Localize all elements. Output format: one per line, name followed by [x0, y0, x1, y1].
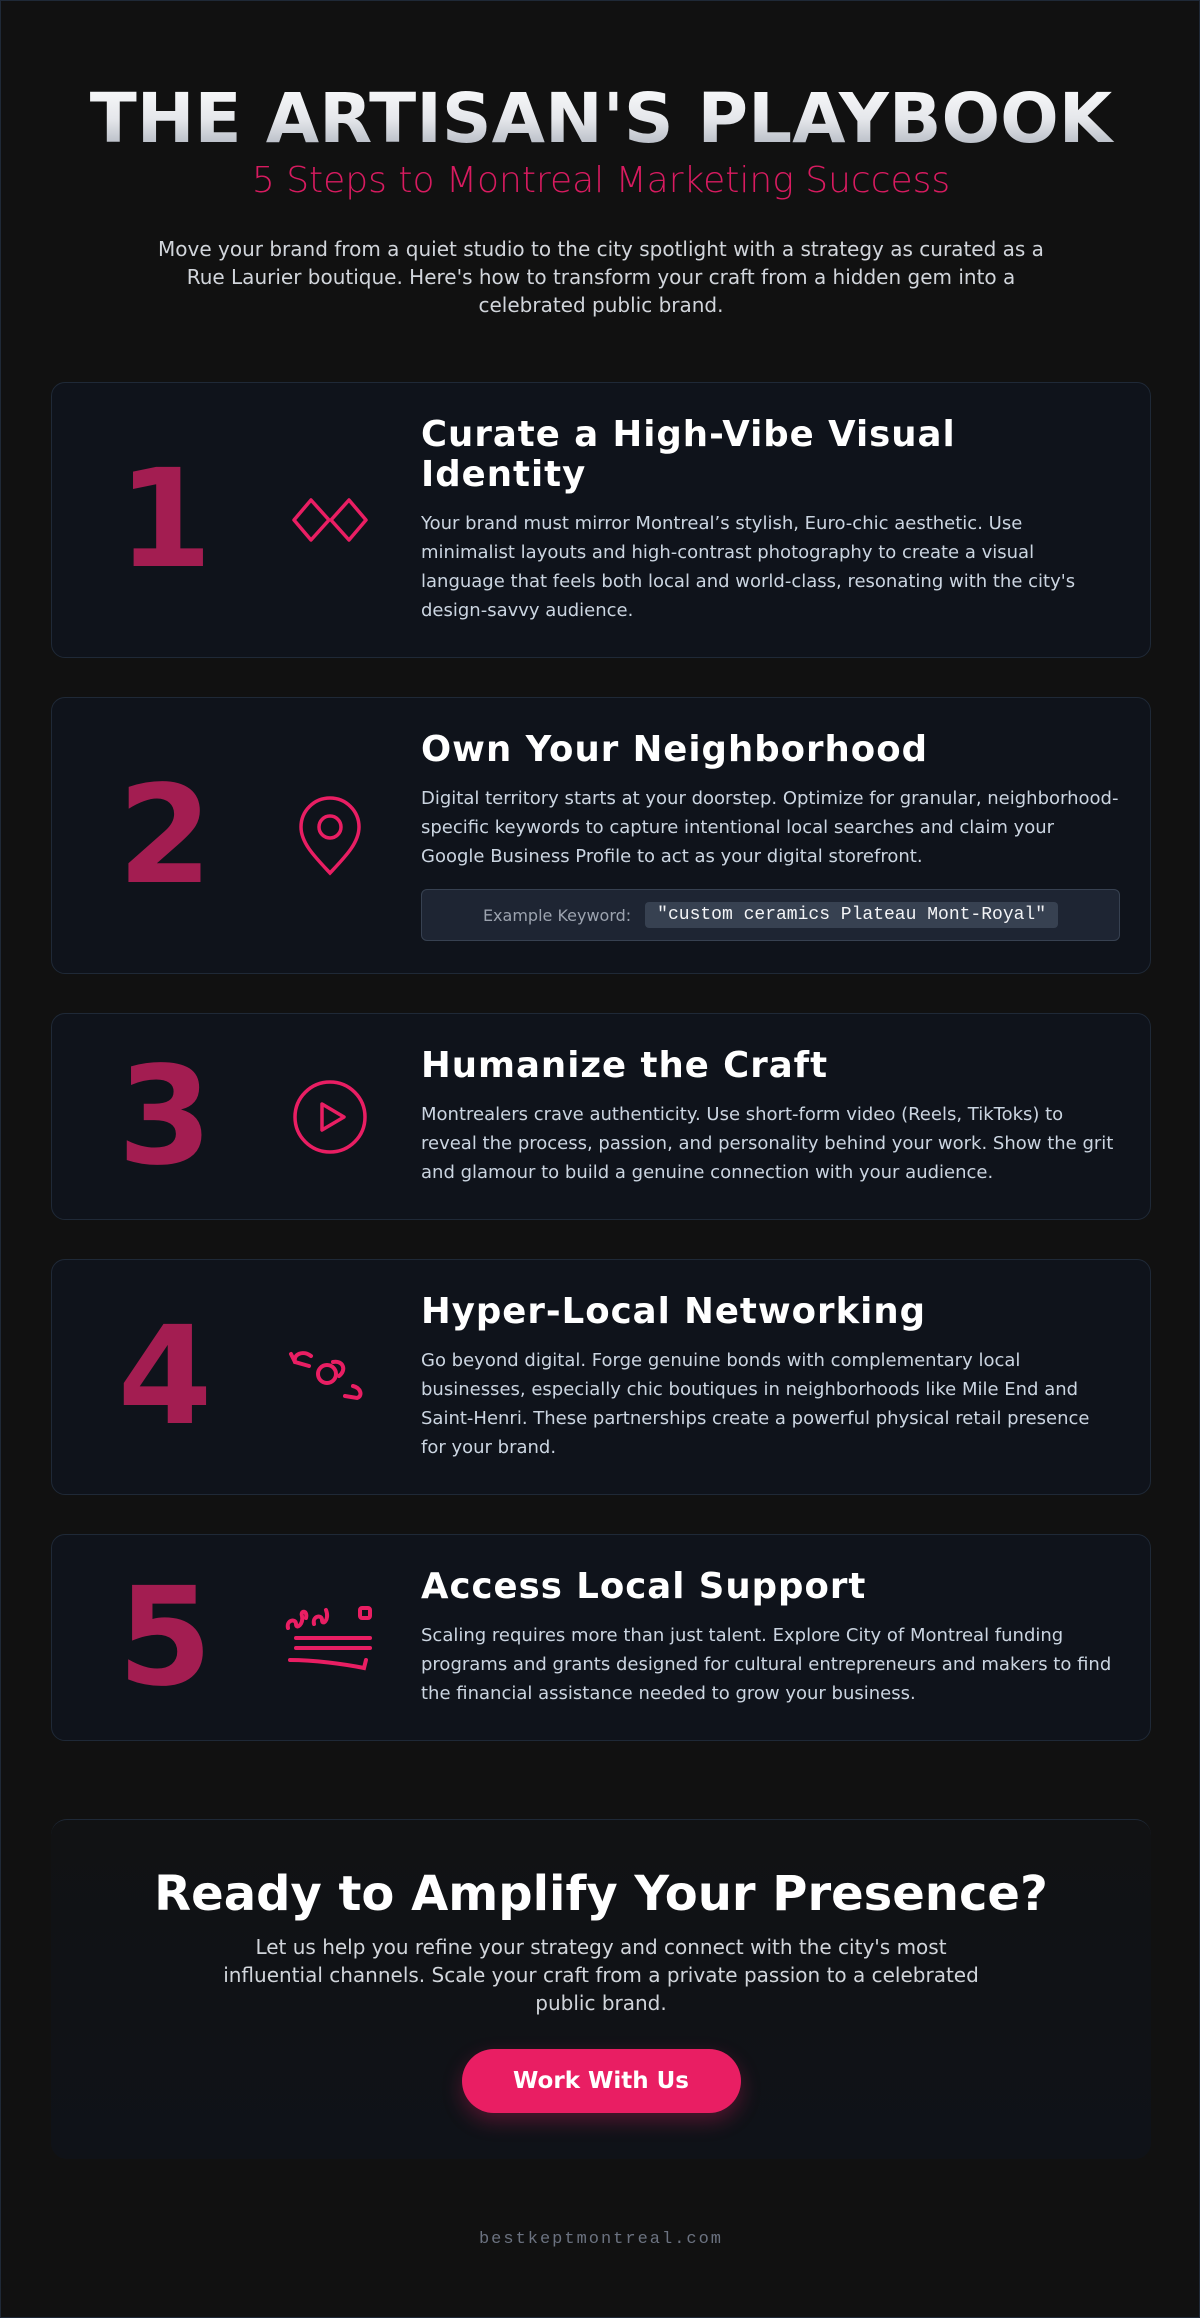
panel: call to action [51, 1819, 1151, 2159]
icon: map pin [299, 796, 361, 876]
step 5 text: Access Local Support [421, 1566, 866, 1607]
step 2 text [421, 729, 1120, 941]
intro text: Move your brand from a quiet studio to the city spotlight with a strategy as curated as a Rue Laurier boutique. Here's how to transform your craft from a hidden gem into a celebrated public brand. [158, 237, 1044, 317]
step 1 text: Curate a High-Vibe Visual Identity [421, 414, 956, 495]
number 3: 3 [118, 1038, 212, 1196]
panel: step 3 [51, 1013, 1151, 1220]
step 3 text [421, 1045, 1113, 1183]
step 3 text: Humanize the Craft [421, 1045, 828, 1086]
subtitle: 5 Steps to Montreal Marketing Success [252, 160, 950, 201]
icon: support [286, 1606, 372, 1670]
button: Work With Us [513, 2068, 689, 2094]
keyword example box: Example Keyword: [483, 906, 631, 924]
icon: networking [288, 1351, 362, 1400]
step 4 text: Hyper-Local Networking [421, 1291, 926, 1332]
step 2 text: Digital territory starts at your doorstep. Optimize for granular, neighborhood-specific keywords to capture intentional local searches and claim your Google Business Profile to act as your digital storefront. [421, 788, 1118, 867]
step 4 text: Go beyond digital. Forge genuine bonds with complementary local businesses, especially chic boutiques in neighborhoods like Mile End and Saint-Henri. These partnerships create a powerful physical retail presence for your brand. [421, 1350, 1090, 1458]
keyword example box [421, 889, 1120, 941]
number 1: 1 [118, 441, 212, 599]
keyword example box: "custom ceramics Plateau Mont-Royal" [657, 905, 1046, 925]
number 4: 4 [118, 1298, 212, 1456]
step 5 text [421, 1566, 1111, 1704]
title: THE ARTISAN'S PLAYBOOK [90, 79, 1112, 159]
cta heading: Ready to Amplify Your Presence? [154, 1866, 1048, 1922]
cta text: Let us help you refine your strategy and connect with the city's most influential channels. Scale your craft from a private passion to a celebrated public brand. [223, 1935, 979, 2015]
step 1 text [421, 414, 1075, 621]
panel: step 5 [51, 1534, 1151, 1741]
step 4 text [421, 1291, 1090, 1458]
number 2: 2 [118, 756, 212, 914]
icon: play button [293, 1080, 367, 1154]
panel: step 1 [51, 382, 1151, 658]
icon: linked diamonds [292, 498, 368, 542]
step 3 text: Montrealers crave authenticity. Use short-form video (Reels, TikToks) to reveal the process, passion, and personality behind your work. Show the grit and glamour to build a genuine connection with your audience. [421, 1104, 1113, 1183]
footer: bestkeptmontreal.com [479, 2230, 723, 2249]
step 5 text: Scaling requires more than just talent. Explore City of Montreal funding programs and grants designed for cultural entrepreneurs and makers to find the financial assistance needed to grow your business. [421, 1625, 1111, 1704]
step 2 text: Own Your Neighborhood [421, 729, 928, 770]
panel: step 2 [51, 697, 1151, 974]
button [462, 2049, 740, 2113]
panel: step 4 [51, 1259, 1151, 1495]
number 5: 5 [118, 1558, 212, 1716]
step 1 text: Your brand must mirror Montreal’s stylish, Euro-chic aesthetic. Use minimalist layouts and high-contrast photography to create a visual language that feels both local and world-class, resonating with the city's design-savvy audience. [421, 513, 1075, 621]
